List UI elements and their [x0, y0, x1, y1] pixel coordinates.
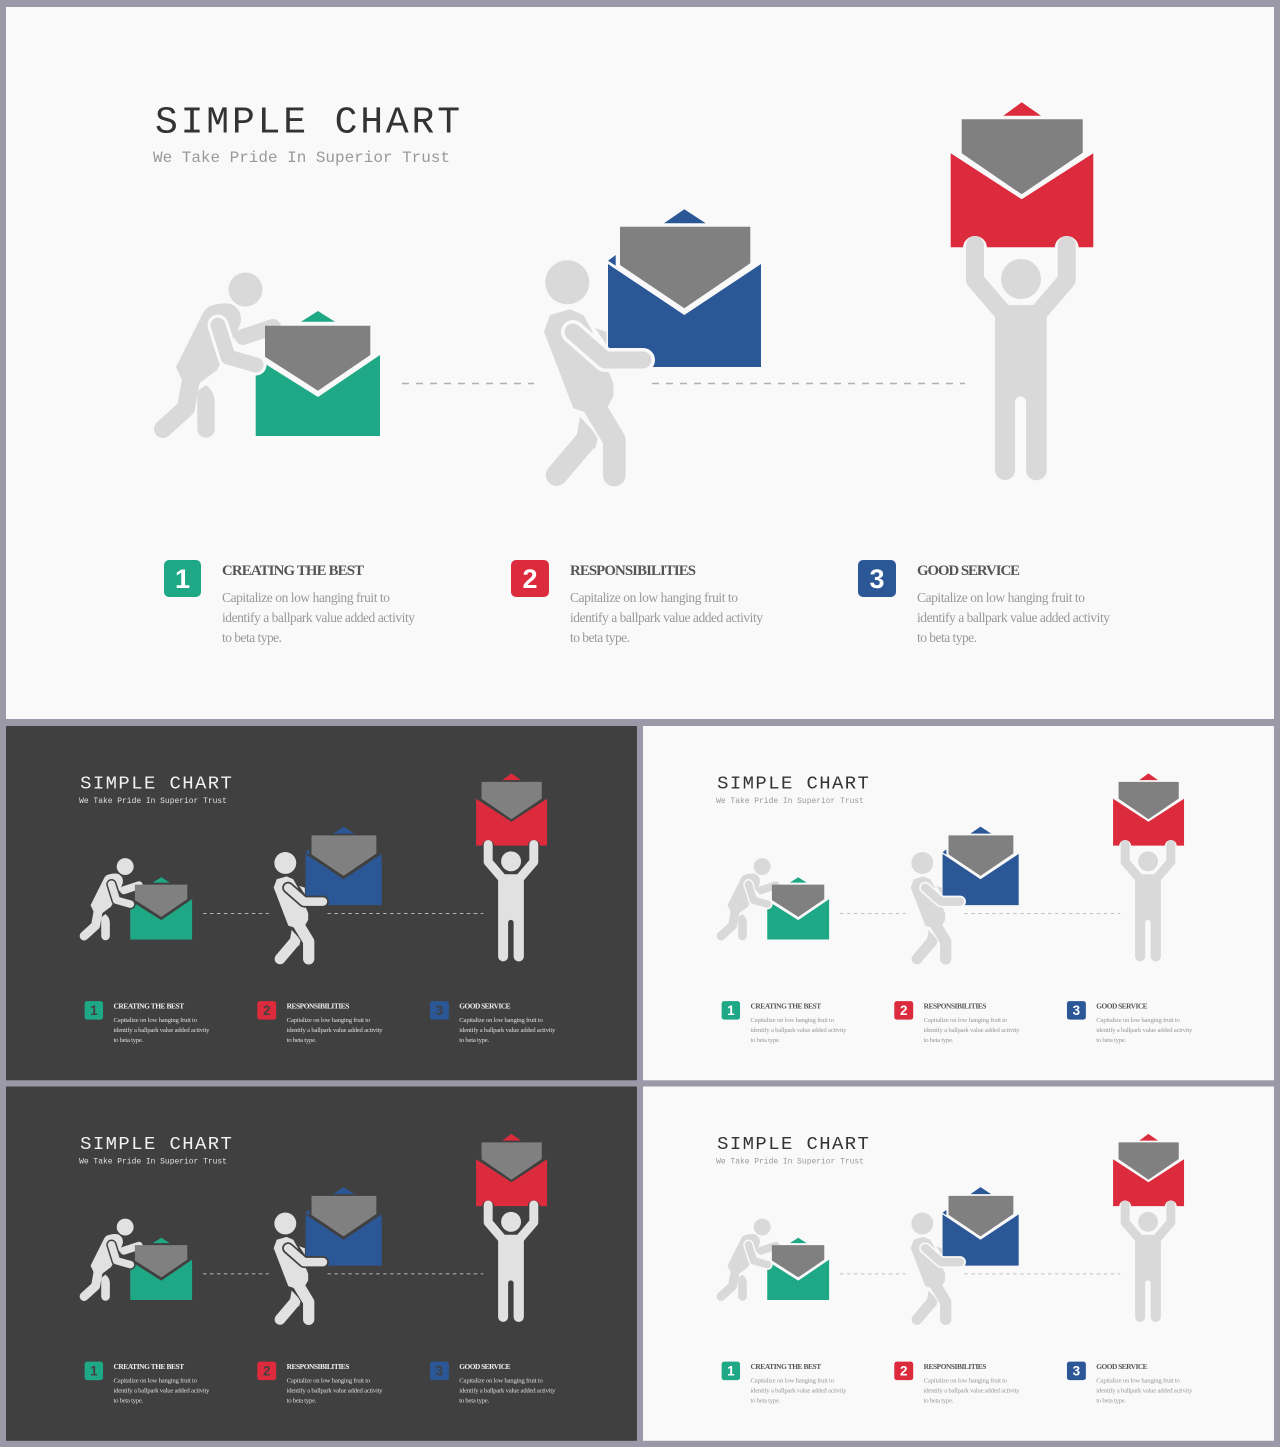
- step 2: 2: [263, 1364, 270, 1379]
- step 3: GOOD SERVICE: [1096, 1362, 1148, 1371]
- step 1: to beta type.: [113, 1037, 144, 1044]
- step 2: RESPONSIBILITIES: [287, 1002, 349, 1011]
- figure lifting red envelope: [476, 773, 547, 962]
- panel: dark slide top left: [6, 726, 637, 1080]
- figure carrying blue envelope: [274, 827, 382, 959]
- step 2: identify a ballpark value added activity: [570, 610, 763, 625]
- step 2: [894, 1001, 1020, 1044]
- step 3: Capitalize on low hanging fruit to: [459, 1378, 544, 1385]
- step 2: 2: [900, 1003, 907, 1018]
- step 1: [164, 560, 415, 645]
- figure pushing green envelope: [84, 1219, 192, 1301]
- figure lifting red envelope: [476, 1134, 547, 1322]
- step 3: 3: [869, 564, 885, 594]
- step 3: identify a ballpark value added activity: [1096, 1027, 1193, 1034]
- step 1: [722, 1001, 847, 1044]
- step 2: to beta type.: [924, 1397, 954, 1404]
- step 2: 2: [522, 564, 538, 594]
- subtitle: We Take Pride In Superior Trust: [153, 149, 450, 167]
- step 3: GOOD SERVICE: [917, 563, 1020, 579]
- step 2: Capitalize on low hanging fruit to: [924, 1378, 1008, 1385]
- panel: light slide bottom right: [643, 1087, 1274, 1441]
- subtitle: We Take Pride In Superior Trust: [716, 1158, 864, 1167]
- step 3: Capitalize on low hanging fruit to: [917, 590, 1085, 605]
- step 3: 3: [1073, 1364, 1080, 1379]
- step 3: to beta type.: [917, 630, 977, 645]
- step 1: identify a ballpark value added activity: [222, 610, 415, 625]
- figure pushing green envelope: [163, 272, 380, 438]
- subtitle: We Take Pride In Superior Trust: [79, 797, 227, 806]
- step 2: identify a ballpark value added activity: [924, 1027, 1020, 1034]
- step 2: Capitalize on low hanging fruit to: [287, 1378, 371, 1385]
- step 3: identify a ballpark value added activity: [917, 610, 1110, 625]
- title: SIMPLE CHART: [80, 772, 232, 794]
- step 3: GOOD SERVICE: [1096, 1002, 1148, 1011]
- step 2: Capitalize on low hanging fruit to: [287, 1017, 371, 1024]
- subtitle: We Take Pride In Superior Trust: [716, 797, 864, 806]
- step 1: Capitalize on low hanging fruit to: [750, 1378, 835, 1385]
- step 1: 1: [727, 1364, 735, 1379]
- dashed connectors: [840, 1273, 1120, 1275]
- step 3: identify a ballpark value added activity: [459, 1027, 556, 1034]
- step 1: to beta type.: [750, 1037, 781, 1044]
- step 3: to beta type.: [1096, 1037, 1126, 1044]
- step 2: identify a ballpark value added activity: [287, 1027, 383, 1034]
- step 1: [85, 1001, 210, 1044]
- step 2: Capitalize on low hanging fruit to: [924, 1017, 1008, 1024]
- panel: large light slide: [6, 7, 1274, 719]
- step 2: [257, 1362, 383, 1404]
- step 1: Capitalize on low hanging fruit to: [113, 1378, 198, 1385]
- title: SIMPLE CHART: [717, 1133, 869, 1155]
- step 3: identify a ballpark value added activity: [459, 1388, 556, 1395]
- title: SIMPLE CHART: [155, 102, 460, 144]
- step 1: identify a ballpark value added activity: [750, 1027, 847, 1034]
- step 2: 2: [900, 1364, 907, 1379]
- step 1: Capitalize on low hanging fruit to: [750, 1017, 835, 1024]
- step 1: identify a ballpark value added activity: [113, 1027, 210, 1034]
- step 1: CREATING THE BEST: [222, 563, 364, 579]
- dashed connectors: [402, 382, 965, 384]
- step 1: to beta type.: [750, 1397, 781, 1404]
- step 2: identify a ballpark value added activity: [924, 1388, 1020, 1395]
- step 3: [1067, 1001, 1193, 1044]
- dashed connectors: [840, 912, 1120, 914]
- figure lifting red envelope: [1113, 1134, 1184, 1322]
- step 1: 1: [175, 564, 190, 594]
- step 1: [722, 1362, 847, 1404]
- step 2: [511, 560, 763, 645]
- step 2: Capitalize on low hanging fruit to: [570, 590, 738, 605]
- step 3: GOOD SERVICE: [459, 1002, 511, 1011]
- step 1: CREATING THE BEST: [750, 1002, 821, 1011]
- step 1: CREATING THE BEST: [113, 1002, 184, 1011]
- step 2: [257, 1001, 383, 1044]
- step 1: CREATING THE BEST: [113, 1362, 184, 1371]
- step 3: GOOD SERVICE: [459, 1362, 511, 1371]
- step 2: RESPONSIBILITIES: [924, 1002, 986, 1011]
- step 2: 2: [263, 1003, 270, 1018]
- step 2: RESPONSIBILITIES: [924, 1362, 986, 1371]
- step 3: [430, 1362, 556, 1404]
- step 2: to beta type.: [287, 1037, 317, 1044]
- figure carrying blue envelope: [274, 1187, 382, 1319]
- subtitle: We Take Pride In Superior Trust: [79, 1158, 227, 1167]
- step 2: to beta type.: [570, 630, 630, 645]
- step 1: 1: [727, 1003, 735, 1018]
- figure pushing green envelope: [84, 858, 192, 940]
- step 1: to beta type.: [113, 1397, 144, 1404]
- title: SIMPLE CHART: [80, 1133, 232, 1155]
- step 2: to beta type.: [924, 1037, 954, 1044]
- step 3: to beta type.: [1096, 1397, 1126, 1404]
- panel: light slide top right: [643, 726, 1274, 1080]
- title: SIMPLE CHART: [717, 772, 869, 794]
- step 1: 1: [90, 1364, 98, 1379]
- step 3: to beta type.: [459, 1037, 489, 1044]
- figure pushing green envelope: [721, 858, 829, 940]
- panel: dark slide bottom left: [6, 1087, 637, 1441]
- step 3: [858, 560, 1110, 645]
- figure pushing green envelope: [721, 1219, 829, 1301]
- step 1: to beta type.: [222, 630, 282, 645]
- figure lifting red envelope: [951, 102, 1093, 480]
- step 2: [894, 1362, 1020, 1404]
- step 1: Capitalize on low hanging fruit to: [113, 1017, 198, 1024]
- step 3: Capitalize on low hanging fruit to: [1096, 1017, 1181, 1024]
- figure lifting red envelope: [1113, 773, 1184, 962]
- step 3: [1067, 1362, 1193, 1404]
- step 1: 1: [90, 1003, 98, 1018]
- figure carrying blue envelope: [911, 1187, 1019, 1319]
- step 3: 3: [1073, 1003, 1080, 1018]
- step 3: Capitalize on low hanging fruit to: [1096, 1378, 1181, 1385]
- step 1: CREATING THE BEST: [750, 1362, 821, 1371]
- step 1: Capitalize on low hanging fruit to: [222, 590, 390, 605]
- dashed connectors: [203, 1273, 483, 1275]
- step 2: RESPONSIBILITIES: [287, 1362, 349, 1371]
- step 1: identify a ballpark value added activity: [113, 1388, 210, 1395]
- step 1: identify a ballpark value added activity: [750, 1388, 847, 1395]
- step 3: 3: [436, 1003, 443, 1018]
- step 3: Capitalize on low hanging fruit to: [459, 1017, 544, 1024]
- figure carrying blue envelope: [544, 209, 761, 475]
- step 2: identify a ballpark value added activity: [287, 1388, 383, 1395]
- step 2: to beta type.: [287, 1397, 317, 1404]
- step 3: identify a ballpark value added activity: [1096, 1388, 1193, 1395]
- dashed connectors: [203, 912, 483, 914]
- figure carrying blue envelope: [911, 827, 1019, 959]
- step 2: RESPONSIBILITIES: [570, 563, 696, 579]
- step 3: to beta type.: [459, 1397, 489, 1404]
- step 1: [85, 1362, 210, 1404]
- step 3: [430, 1001, 556, 1044]
- step 3: 3: [436, 1364, 443, 1379]
